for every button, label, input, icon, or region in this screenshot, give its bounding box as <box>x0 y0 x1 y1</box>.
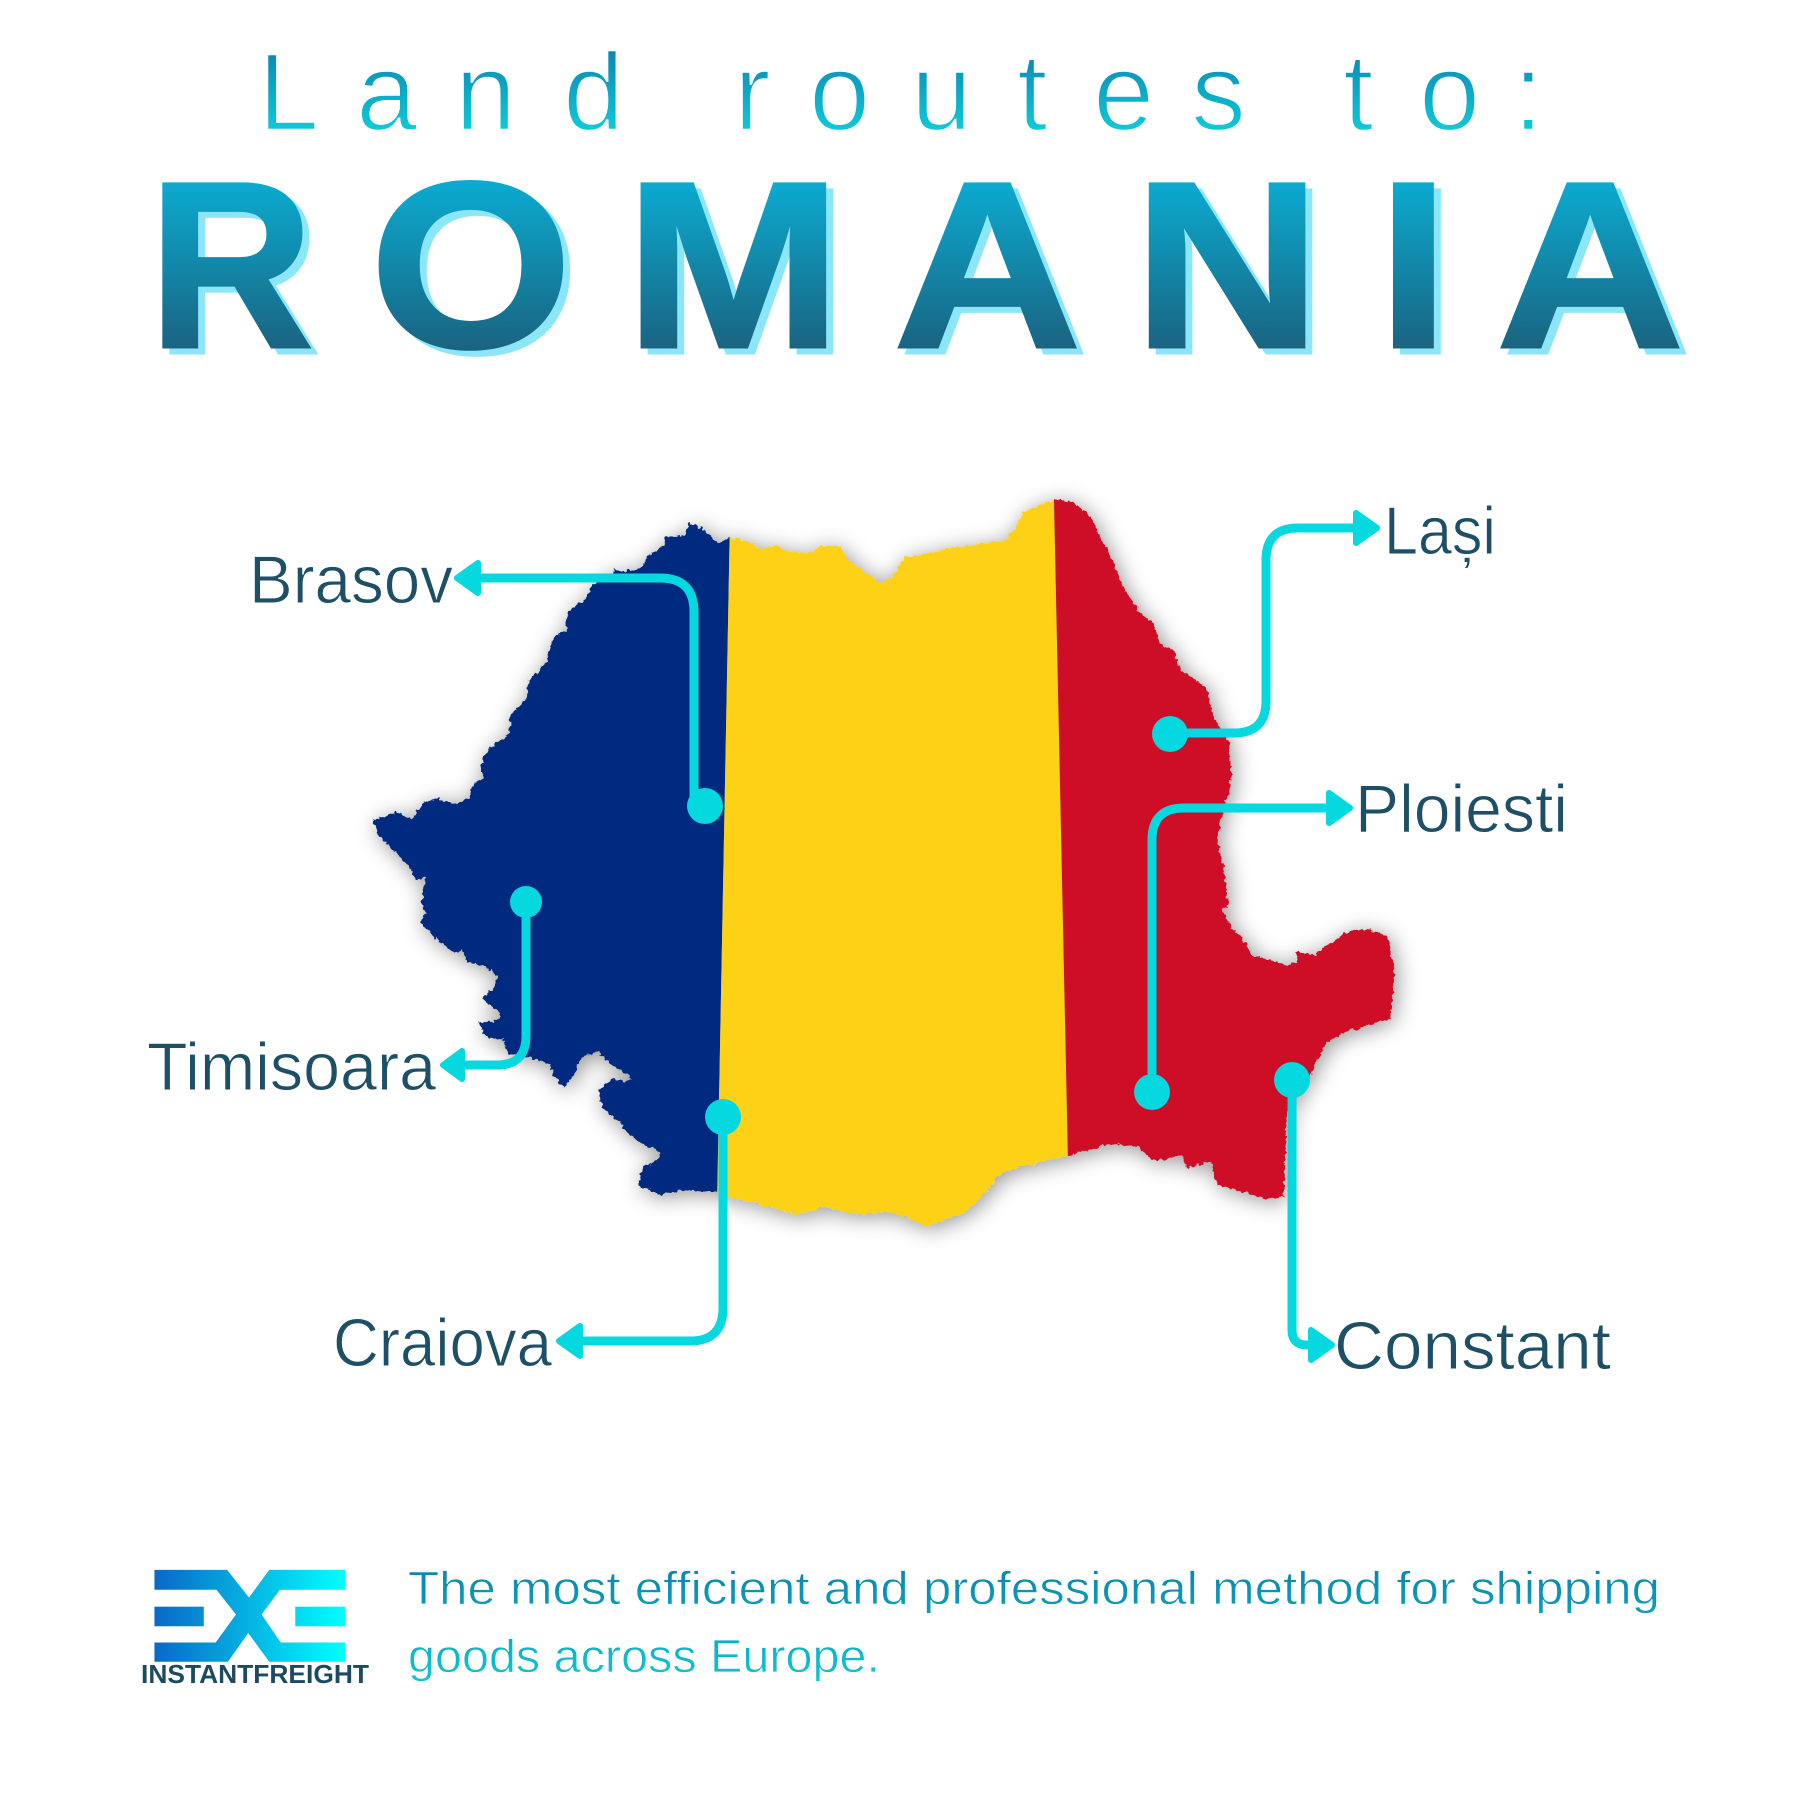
title: ROMANIA: OMANIA <box>370 132 1684 397</box>
label: Lași <box>1384 493 1496 569</box>
arrowhead <box>1311 1330 1332 1360</box>
title: ROMANIA: R <box>149 132 314 397</box>
callout: Brasov <box>249 542 723 824</box>
flag stripe: blue <box>366 516 741 1210</box>
dot <box>510 886 542 918</box>
tagline <box>408 1562 1660 1682</box>
callout: Lasi <box>1152 493 1496 752</box>
callout: Ploiesti <box>1134 771 1568 1110</box>
dot <box>1152 716 1188 752</box>
dot <box>687 788 723 824</box>
callout: Craiova <box>333 1099 741 1381</box>
flag stripe: red <box>1054 480 1421 1256</box>
map: Romania in flag colours <box>350 480 1421 1256</box>
arrowhead <box>443 1051 462 1079</box>
label: Timisoara <box>147 1029 436 1105</box>
label: Brasov <box>249 542 453 618</box>
label: Ploiesti <box>1355 771 1568 847</box>
tagline: The most efficient and professional method for shipping <box>408 1562 1660 1614</box>
connector line <box>576 1117 723 1341</box>
connector line <box>458 902 526 1065</box>
dot <box>1274 1062 1310 1098</box>
logo wordmark: INSTANTFREIGHT <box>141 1659 369 1689</box>
flag stripe: yellow <box>716 480 1070 1256</box>
label: Constant <box>1334 1308 1611 1384</box>
connector line <box>474 578 705 806</box>
callout: Timisoara <box>147 886 542 1105</box>
arrowhead <box>1329 793 1350 823</box>
connector line <box>1170 528 1360 733</box>
arrowhead <box>1356 513 1377 543</box>
connector line <box>1152 808 1333 1092</box>
tagline: goods across Europe. <box>408 1630 880 1682</box>
label: Craiova <box>333 1305 552 1381</box>
arrowhead <box>457 563 478 593</box>
dot <box>705 1099 741 1135</box>
logo: InstantFreight <box>141 1570 369 1689</box>
dot <box>1134 1074 1170 1110</box>
heading: Land routes to: Land routes to: <box>258 31 1544 154</box>
connector line <box>1292 1080 1315 1345</box>
arrowhead <box>559 1326 580 1356</box>
callout: Constant <box>1274 1062 1611 1384</box>
logo mark <box>154 1570 345 1662</box>
